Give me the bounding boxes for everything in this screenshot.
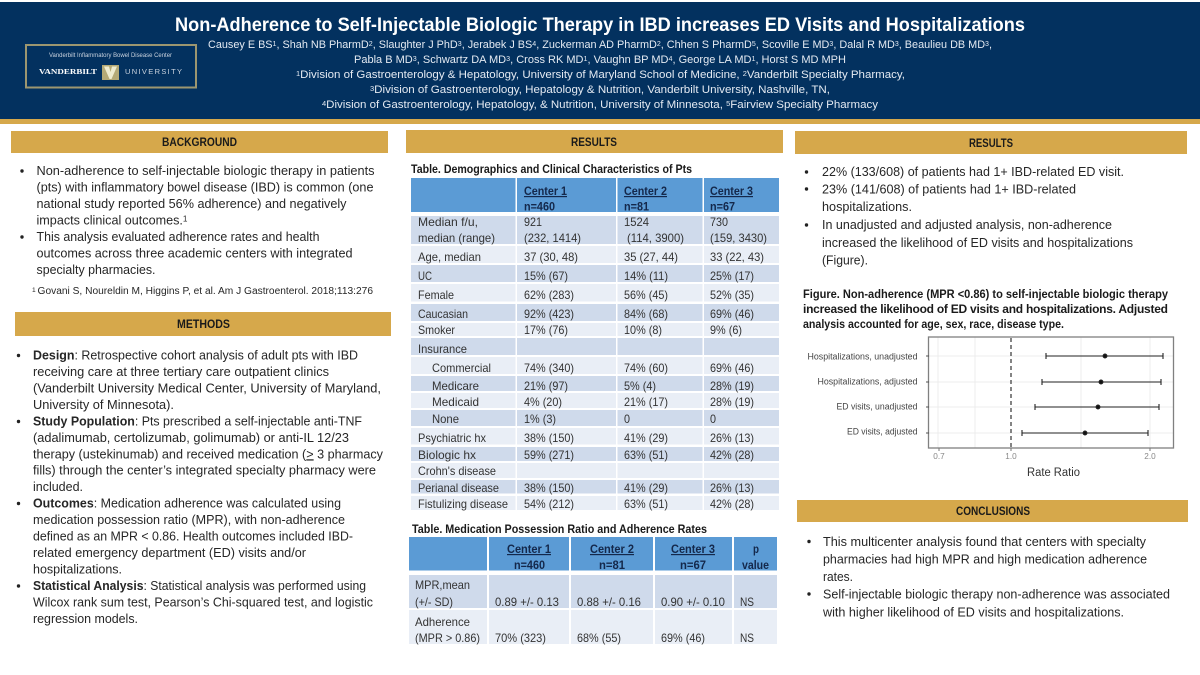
table: medication possession ratio and adherence rates: 0.89 +/- 0.13 bbox=[495, 595, 559, 609]
table: demographics and clinical characteristics: Commercial bbox=[432, 361, 491, 375]
heading: results bbox=[795, 131, 1187, 154]
table: demographics and clinical characteristics: 35 (27, 44) bbox=[624, 250, 678, 264]
conclusions bullet list: with higher likelihood of ED visits and hospitalizations. bbox=[822, 606, 1124, 620]
table: medication possession ratio and adherence rates: NS bbox=[740, 595, 754, 609]
background bullet list: national study reported 56% adherence) and negatively bbox=[36, 197, 347, 211]
table: demographics and clinical characteristics: Medicaid bbox=[432, 395, 479, 409]
table: demographics and clinical characteristics: Fistulizing disease bbox=[418, 497, 508, 511]
table: demographics and clinical characteristics: Caucasian bbox=[418, 307, 468, 321]
table: demographics and clinical characteristics: 730 bbox=[710, 215, 728, 229]
table: demographics and clinical characteristics: 14% (11) bbox=[624, 269, 668, 283]
table: demographics and clinical characteristics: 28% (19) bbox=[710, 379, 754, 393]
x axis tick labels bbox=[933, 452, 1156, 461]
table: demographics and clinical characteristics: Center 2 bbox=[624, 184, 667, 198]
table: demographics and clinical characteristics: 37 (30, 48) bbox=[524, 250, 578, 264]
table: demographics and clinical characteristics: Smoker bbox=[418, 323, 455, 337]
results bullet list: 23% (141/608) of patients had 1+ IBD-related bbox=[822, 182, 1076, 196]
table: demographics and clinical characteristics: Insurance bbox=[418, 342, 467, 356]
table: demographics and clinical characteristics: 42% (28) bbox=[710, 497, 754, 511]
table: demographics and clinical characteristics: 0 bbox=[710, 412, 716, 426]
table: demographics and clinical characteristics: 63% (51) bbox=[624, 497, 668, 511]
authors and affiliations: Pabla B MD3, Schwartz DA MD3, Cross RK MD1, Vaughn BP MD4, George LA MD1, Horst S MD MPH bbox=[354, 54, 846, 66]
heading: results: RESULTS bbox=[969, 138, 1013, 150]
methods bullet list: Design: Retrospective cohort analysis of adult pts with IBD bbox=[33, 348, 358, 362]
table: demographics and clinical characteristics: 0 bbox=[624, 412, 630, 426]
table: demographics and clinical characteristics: Psychiatric hx bbox=[418, 431, 486, 445]
title: Non-Adherence to Self-Injectable Biologic Therapy in IBD increases ED Visits and Hospitalizations bbox=[175, 14, 1025, 36]
results bullet list: In unadjusted and adjusted analysis, non-adherence bbox=[822, 218, 1112, 232]
background bullet list: outcomes across three academic centers with integrated bbox=[36, 246, 353, 260]
logo: Vanderbilt University: UNIVERSITY bbox=[125, 67, 182, 76]
methods bullet list: therapy (ustekinumab) and received medication (> 3 pharmacy bbox=[33, 447, 384, 461]
table: demographics and clinical characteristics: 52% (35) bbox=[710, 288, 754, 302]
logo: Vanderbilt University bbox=[26, 45, 196, 88]
table: demographics and clinical characteristics: 41% (29) bbox=[624, 481, 668, 495]
footnote reference: 1 Govani S, Noureldin M, Higgins P, et al. Am J Gastroenterol. 2018;113:276 bbox=[32, 286, 373, 297]
methods bullet list: Wilcox rank sum test, Pearson’s Chi-squared test, and logistic bbox=[33, 596, 373, 610]
background bullet list: (pts) with inflammatory bowel disease (IBD) is common (one bbox=[36, 180, 374, 194]
x axis title: Rate Ratio bbox=[1027, 467, 1080, 479]
methods bullet list: defined as an MPR < 0.86. Health outcomes included IBD- bbox=[33, 530, 353, 544]
table: demographics and clinical characteristics: 84% (68) bbox=[624, 307, 668, 321]
table: demographics and clinical characteristics: 21% (17) bbox=[624, 395, 668, 409]
background bullet list bbox=[20, 164, 375, 277]
background bullet list: Non-adherence to self-injectable biologic therapy in patients bbox=[36, 164, 374, 178]
methods bullet list: included. bbox=[33, 480, 83, 494]
table: demographics and clinical characteristics: Center 3 bbox=[710, 184, 753, 198]
methods bullet list: regression models. bbox=[33, 612, 138, 626]
heading: methods: METHODS bbox=[177, 319, 230, 331]
methods bullet list: hospitalizations. bbox=[33, 562, 122, 576]
table: demographics and clinical characteristics: Perianal disease bbox=[418, 481, 499, 495]
figure caption: Figure. Non-adherence (MPR <0.86) to self-injectable biologic therapy bbox=[803, 287, 1168, 301]
results bullet list: (Figure). bbox=[822, 254, 868, 268]
results bullet list: increased the likelihood of ED visits and hospitalizations bbox=[822, 236, 1133, 250]
table: medication possession ratio and adherence rates: n=67 bbox=[680, 558, 706, 572]
table: demographics and clinical characteristics: Crohn's disease bbox=[418, 464, 496, 478]
table: demographics and clinical characteristics: 4% (20) bbox=[524, 395, 562, 409]
panel: methods bbox=[15, 312, 391, 626]
methods bullet list: receiving care at three tertiary care outpatient clinics bbox=[33, 365, 329, 379]
figure caption: analysis accounted for age, sex, race, disease type. bbox=[803, 317, 1064, 331]
table title: adherence: Table. Medication Possession Ratio and Adherence Rates bbox=[412, 522, 707, 536]
table: demographics and clinical characteristics: 26% (13) bbox=[710, 481, 754, 495]
table: medication possession ratio and adherence rates: NS bbox=[740, 631, 754, 645]
panel: results figure bbox=[795, 131, 1187, 479]
y axis labels: ED visits, adjusted bbox=[847, 426, 918, 436]
table: medication possession ratio and adherence rates: (MPR > 0.86) bbox=[415, 631, 480, 645]
heading: methods bbox=[15, 312, 391, 336]
table: medication possession ratio and adherence rates: 70% (323) bbox=[495, 631, 546, 645]
table: medication possession ratio and adherence rates: (+/- SD) bbox=[415, 595, 453, 609]
results bullet list bbox=[805, 165, 1133, 268]
table: demographics and clinical characteristics: Biologic hx bbox=[418, 448, 476, 462]
conclusions bullet list: This multicenter analysis found that centers with specialty bbox=[823, 535, 1147, 549]
table: demographics and clinical characteristics: 15% (67) bbox=[524, 269, 568, 283]
header banner bbox=[0, 2, 1200, 124]
table: demographics and clinical characteristics: 74% (340) bbox=[524, 361, 574, 375]
table: demographics and clinical characteristics: median (range) bbox=[418, 231, 495, 245]
logo: Vanderbilt University: Vanderbilt Inflammatory Bowel Disease Center bbox=[49, 52, 173, 59]
table: medication possession ratio and adherence rates bbox=[409, 537, 777, 645]
table: demographics and clinical characteristics: Medicare bbox=[432, 379, 479, 393]
heading: background: BACKGROUND bbox=[162, 137, 237, 149]
table: demographics and clinical characteristics: 38% (150) bbox=[524, 431, 574, 445]
chart: forest plot of rate ratios bbox=[808, 337, 1174, 479]
authors and affiliations: Causey E BS1, Shah NB PharmD2, Slaughter J PhD3, Jerabek J BS4, Zuckerman AD PharmD2, Chhen S PharmD5, Scoville E MD3, Dalal R MD3, Beaulieu DB MD3, bbox=[208, 39, 992, 51]
heading: background bbox=[11, 131, 388, 153]
methods bullet list: Outcomes: Medication adherence was calculated using bbox=[33, 497, 341, 511]
series: hospitalizations unadjusted bbox=[1046, 353, 1163, 359]
table: demographics and clinical characteristics: Center 1 bbox=[524, 184, 567, 198]
table: medication possession ratio and adherence rates: Center 1 bbox=[507, 542, 551, 556]
table: demographics and clinical characteristics: 92% (423) bbox=[524, 307, 574, 321]
table: demographics and clinical characteristics: 25% (17) bbox=[710, 269, 754, 283]
table: demographics and clinical characteristics: 9% (6) bbox=[710, 323, 742, 337]
panel: background bbox=[11, 131, 388, 297]
table: demographics and clinical characteristics: (232, 1414) bbox=[524, 231, 581, 245]
table: demographics and clinical characteristics: 28% (19) bbox=[710, 395, 754, 409]
authors and affiliations bbox=[208, 39, 992, 111]
table: demographics and clinical characteristics: 59% (271) bbox=[524, 448, 574, 462]
table: demographics and clinical characteristics: 62% (283) bbox=[524, 288, 574, 302]
table: medication possession ratio and adherence rates: Adherence bbox=[415, 615, 470, 629]
panel: results tables bbox=[406, 130, 783, 645]
conclusions bullet list: pharmacies had high MPR and high medication adherence bbox=[823, 552, 1147, 566]
table: medication possession ratio and adherence rates: p bbox=[753, 542, 759, 556]
table: demographics and clinical characteristics: 74% (60) bbox=[624, 361, 668, 375]
table: demographics and clinical characteristics: n=81 bbox=[624, 200, 649, 214]
y axis labels: Hospitalizations, unadjusted bbox=[808, 352, 918, 362]
results bullet list: hospitalizations. bbox=[822, 200, 912, 214]
conclusions bullet list bbox=[807, 535, 1170, 620]
table: medication possession ratio and adherence rates: 0.90 +/- 0.10 bbox=[661, 595, 725, 609]
heading: results bbox=[406, 130, 783, 153]
background bullet list: This analysis evaluated adherence rates and health bbox=[36, 230, 320, 244]
table: demographics and clinical characteristics: 54% (212) bbox=[524, 497, 574, 511]
table: demographics and clinical characteristics: 10% (8) bbox=[624, 323, 662, 337]
series: hospitalizations adjusted bbox=[1042, 379, 1161, 385]
series: ED visits adjusted bbox=[1022, 430, 1148, 436]
results bullet list: 22% (133/608) of patients had 1+ IBD-related ED visit. bbox=[822, 165, 1124, 179]
x axis tick labels: 1.0 bbox=[1005, 452, 1017, 461]
background bullet list: specialty pharmacies. bbox=[36, 263, 156, 277]
conclusions bullet list: rates. bbox=[823, 570, 853, 584]
table: demographics and clinical characteristics: None bbox=[432, 412, 459, 426]
table: demographics and clinical characteristics: 17% (76) bbox=[524, 323, 568, 337]
table: medication possession ratio and adherence rates: Center 3 bbox=[671, 542, 715, 556]
logo: Vanderbilt University: VANDERBILT bbox=[39, 67, 97, 76]
methods bullet list: Statistical Analysis: Statistical analysis was performed using bbox=[33, 579, 366, 593]
table: demographics and clinical characteristics bbox=[411, 178, 779, 511]
panel: conclusions bbox=[797, 500, 1188, 620]
methods bullet list: (adalimumab, certolizumab, golimumab) or anti-IL 12/23 bbox=[33, 431, 349, 445]
table: demographics and clinical characteristics: 42% (28) bbox=[710, 448, 754, 462]
table: medication possession ratio and adherence rates: Center 2 bbox=[590, 542, 634, 556]
authors and affiliations: 3Division of Gastroenterology, Hepatology & Nutrition, Vanderbilt University, Nashville, TN, bbox=[370, 84, 830, 96]
table: demographics and clinical characteristics: 41% (29) bbox=[624, 431, 668, 445]
table: demographics and clinical characteristics: (159, 3430) bbox=[710, 231, 767, 245]
heading: conclusions bbox=[797, 500, 1188, 522]
table: demographics and clinical characteristics: 69% (46) bbox=[710, 361, 754, 375]
table: demographics and clinical characteristics: (114, 3900) bbox=[627, 231, 684, 245]
table: medication possession ratio and adherence rates: 0.88 +/- 0.16 bbox=[577, 595, 641, 609]
table: medication possession ratio and adherence rates: 68% (55) bbox=[577, 631, 621, 645]
methods bullet list: medication possession ratio (MPR), with non-adherence bbox=[33, 513, 345, 527]
table: medication possession ratio and adherence rates: MPR,mean bbox=[415, 578, 470, 592]
table: demographics and clinical characteristics: Age, median bbox=[418, 250, 481, 264]
table: medication possession ratio and adherence rates: 69% (46) bbox=[661, 631, 705, 645]
table: demographics and clinical characteristics: 5% (4) bbox=[624, 379, 656, 393]
y axis labels: Hospitalizations, adjusted bbox=[818, 376, 918, 386]
table: demographics and clinical characteristics: 38% (150) bbox=[524, 481, 574, 495]
figure caption: increased the likelihood of ED visits and hospitalizations. Adjusted bbox=[803, 302, 1168, 316]
y axis labels: ED visits, unadjusted bbox=[836, 402, 918, 412]
table: demographics and clinical characteristics: Median f/u, bbox=[418, 215, 478, 229]
methods bullet list: (Vanderbilt University Medical Center, University of Maryland, bbox=[33, 381, 381, 395]
conclusions bullet list: Self-injectable biologic therapy non-adherence was associated bbox=[823, 588, 1170, 602]
table: demographics and clinical characteristics: 921 bbox=[524, 215, 542, 229]
heading: results: RESULTS bbox=[571, 137, 617, 149]
methods bullet list: fills) through the center’s integrated specialty pharmacy were bbox=[33, 464, 376, 478]
table: medication possession ratio and adherence rates: n=81 bbox=[599, 558, 625, 572]
x axis tick labels: 2.0 bbox=[1144, 452, 1156, 461]
x axis tick labels: 0.7 bbox=[933, 452, 945, 461]
table: demographics and clinical characteristics: 63% (51) bbox=[624, 448, 668, 462]
table: medication possession ratio and adherence rates: value bbox=[742, 558, 769, 572]
background bullet list: impacts clinical outcomes.1 bbox=[36, 214, 188, 228]
table: demographics and clinical characteristics: UC bbox=[418, 269, 432, 283]
table: demographics and clinical characteristics: 69% (46) bbox=[710, 307, 754, 321]
table: demographics and clinical characteristics: Female bbox=[418, 288, 454, 302]
methods bullet list bbox=[17, 348, 384, 626]
methods bullet list: University of Minnesota). bbox=[33, 398, 174, 412]
table title: demographics: Table. Demographics and Clinical Characteristics of Pts bbox=[411, 162, 692, 176]
table: demographics and clinical characteristics: 26% (13) bbox=[710, 431, 754, 445]
table: demographics and clinical characteristics: 56% (45) bbox=[624, 288, 668, 302]
methods bullet list: related emergency department (ED) visits and/or bbox=[33, 546, 306, 560]
table: medication possession ratio and adherence rates: n=460 bbox=[514, 558, 545, 572]
table: demographics and clinical characteristics: n=460 bbox=[524, 200, 555, 214]
heading: conclusions: CONCLUSIONS bbox=[956, 506, 1030, 518]
table: demographics and clinical characteristics: 33 (22, 43) bbox=[710, 250, 764, 264]
table: demographics and clinical characteristics: 21% (97) bbox=[524, 379, 568, 393]
figure caption bbox=[803, 287, 1168, 331]
table: demographics and clinical characteristics: n=67 bbox=[710, 200, 735, 214]
authors and affiliations: 4Division of Gastroenterology, Hepatology, & Nutrition, University of Minnesota, 5Fairview Specialty Pharmacy bbox=[322, 99, 878, 111]
authors and affiliations: 1Division of Gastroenterology & Hepatology, University of Maryland School of Medicine, 2Vanderbilt Specialty Pharmacy, bbox=[296, 69, 905, 81]
series: ED visits unadjusted bbox=[1035, 404, 1159, 410]
table: demographics and clinical characteristics: 1% (3) bbox=[524, 412, 556, 426]
y axis labels bbox=[808, 352, 929, 436]
table: demographics and clinical characteristics: 1524 bbox=[624, 215, 649, 229]
methods bullet list: Study Population: Pts prescribed a self-injectable anti-TNF bbox=[33, 414, 362, 428]
